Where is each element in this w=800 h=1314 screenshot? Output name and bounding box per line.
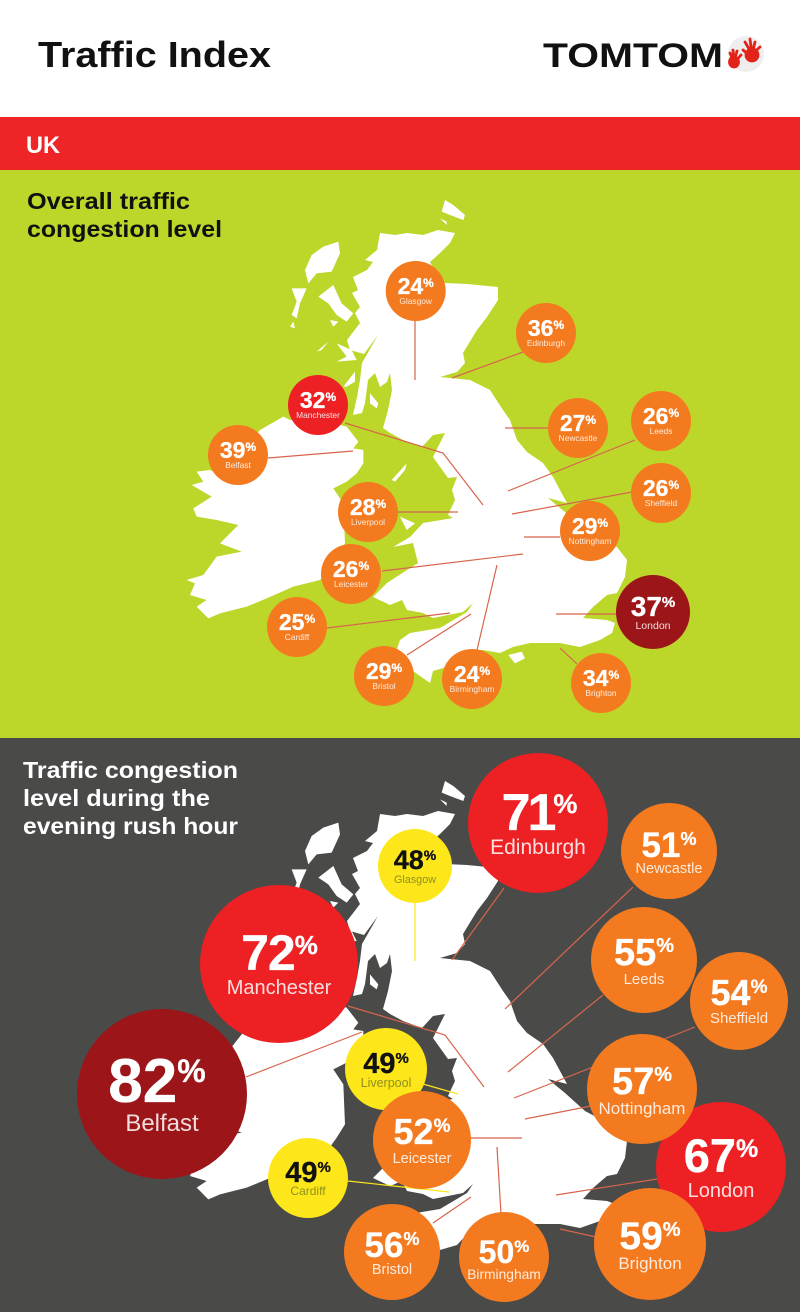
marker: Leicester: % [434,1116,451,1137]
marker: Nottingham: Nottingham [569,536,611,546]
marker: Brighton [571,653,631,713]
heading: evening rush hour: level during the [23,785,210,811]
marker: Bristol: % [391,661,402,675]
marker: Sheffield: Sheffield [710,1010,768,1027]
marker: London: 67 [684,1129,736,1182]
marker: London: London [688,1180,754,1202]
header band: UK [0,117,800,170]
marker: Liverpool: 28 [350,494,375,520]
marker: Cardiff [268,1138,348,1218]
marker: Bristol: Bristol [372,1262,412,1278]
header band: UK: UK [26,132,61,159]
marker: Edinburgh [468,753,608,893]
panel: overall traffic congestion level [0,170,800,738]
marker: Cardiff: % [317,1159,331,1176]
marker: Glasgow [378,829,452,903]
marker: Sheffield: % [751,977,768,998]
marker: Cardiff [267,597,327,657]
marker: London: London [635,620,671,632]
marker: Sheffield: 54 [711,972,751,1013]
marker: Bristol [354,646,414,706]
marker: Glasgow: % [424,847,437,863]
marker: Liverpool: 49 [363,1048,395,1080]
marker: Brighton: Brighton [618,1254,682,1273]
marker: Nottingham: % [597,516,608,530]
heading: overall: congestion level [27,216,222,242]
panel: evening rush hour congestion level [0,738,800,1312]
marker: Nottingham: 57 [612,1061,654,1103]
marker: Newcastle: 27 [560,410,585,436]
marker: Sheffield: 26 [643,475,668,501]
marker: Bristol: % [403,1229,419,1249]
marker: Brighton [594,1188,706,1300]
marker: Newcastle: Newcastle [636,861,702,877]
marker: Brighton: 34 [583,665,608,691]
marker: Manchester: Manchester [227,977,332,999]
connector lines [246,887,695,1237]
marker: Newcastle [548,398,608,458]
heading: evening rush hour [23,757,238,839]
marker: Birmingham: Birmingham [450,684,494,694]
marker: London [656,1102,786,1232]
marker: Leeds: % [668,406,679,420]
marker: Newcastle: 51 [642,826,680,865]
marker: Edinburgh: 71 [502,784,553,842]
marker: Manchester [200,885,358,1043]
marker: Newcastle: % [680,829,696,849]
marker: Manchester: 72 [241,925,295,981]
marker: London: % [662,594,675,611]
marker: Manchester: % [295,930,318,960]
map: UK and Ireland [187,200,627,683]
marker: Birmingham: 50 [479,1234,514,1270]
marker: Leeds: 55 [614,932,656,974]
marker: London [616,575,690,649]
marker: Glasgow: Glasgow [399,296,433,306]
marker: Glasgow: % [423,276,434,290]
map: UK and Ireland [187,781,627,1264]
marker: Glasgow: Glasgow [394,874,436,886]
marker: Liverpool: % [375,497,386,511]
marker: Leicester: Leicester [393,1151,452,1167]
marker: Leeds: Leeds [624,971,664,988]
marker: Nottingham: % [654,1064,672,1086]
marker: Bristol: 29 [366,658,391,684]
marker: Brighton: % [663,1219,681,1241]
marker: Leicester: 52 [394,1111,434,1152]
marker: Edinburgh: Edinburgh [527,338,565,348]
marker: Edinburgh [516,303,576,363]
marker: Belfast: 82 [108,1047,177,1116]
marker: London: 37 [631,591,662,622]
marker: Newcastle: Newcastle [559,433,598,443]
marker: Leeds: % [656,935,674,957]
marker: Cardiff: 25 [279,609,304,635]
heading: overall: Overall traffic [27,188,190,214]
marker: Belfast: % [177,1053,206,1089]
marker: Sheffield: Sheffield [645,498,678,508]
marker: Edinburgh: % [553,318,564,332]
marker: Liverpool [338,482,398,542]
heading: evening rush hour: Traffic congestion [23,757,238,783]
marker: Birmingham: % [514,1237,529,1256]
marker: Leicester: 26 [333,556,358,582]
heading: evening rush hour: evening rush hour [23,813,238,839]
marker: Glasgow [386,261,446,321]
marker: Manchester: 32 [300,387,325,413]
connector lines [268,320,635,664]
marker: Cardiff: 49 [285,1157,317,1189]
marker: Leicester: Leicester [334,579,368,589]
marker: Leeds [631,391,691,451]
marker: Leicester [373,1091,471,1189]
marker: Birmingham [442,649,502,709]
marker: Cardiff: % [304,612,315,626]
marker: Bristol [344,1204,440,1300]
marker: Belfast: % [245,440,256,454]
marker: Birmingham: 24 [454,661,479,687]
marker: Brighton: 59 [619,1215,663,1258]
marker: Leeds [591,907,697,1013]
marker: Newcastle: % [585,413,596,427]
marker: Nottingham: 29 [572,513,597,539]
marker: Nottingham [587,1034,697,1144]
marker: Leeds: Leeds [650,426,672,436]
marker: Belfast: Belfast [125,1110,199,1137]
marker: Glasgow: 24 [398,273,423,299]
marker: Newcastle [621,803,717,899]
marker: Birmingham: Birmingham [467,1267,541,1282]
marker: Belfast [77,1009,247,1179]
marker: Manchester: % [325,390,336,404]
marker: Liverpool: Liverpool [361,1076,411,1090]
marker: Sheffield: % [668,478,679,492]
marker: Nottingham: Nottingham [599,1099,685,1118]
marker: Liverpool [345,1028,427,1110]
title: Traffic Index [38,34,271,75]
marker: Edinburgh: % [553,789,577,819]
marker: Liverpool: Liverpool [351,517,385,527]
marker: Nottingham [560,501,620,561]
marker: London: % [736,1135,758,1163]
marker: Liverpool: % [395,1050,409,1067]
marker: Edinburgh: Edinburgh [490,836,586,859]
marker: Birmingham: % [479,664,490,678]
marker: Cardiff: Cardiff [290,1184,326,1198]
marker: Sheffield [631,463,691,523]
marker: Cardiff: Cardiff [285,632,310,642]
marker: Edinburgh: 36 [528,315,553,341]
marker: Sheffield [690,952,788,1050]
marker: Leicester: % [358,559,369,573]
marker: Brighton: % [608,668,619,682]
logo: TomTom: TOMTOM [543,37,723,75]
marker: Belfast: 39 [220,437,245,463]
marker: Bristol: 56 [365,1226,403,1265]
logo: TomTom [543,36,764,75]
marker: Bristol: Bristol [372,681,396,691]
marker: Manchester [288,375,348,435]
marker: Leicester [321,544,381,604]
marker: Belfast [208,425,268,485]
marker: Brighton: Brighton [585,688,617,698]
marker: Manchester: Manchester [296,410,340,420]
marker: Birmingham [459,1212,549,1302]
marker: Glasgow: 48 [394,845,424,875]
marker: Belfast: Belfast [225,460,251,470]
heading: overall [27,188,222,242]
marker: Leeds: 26 [643,403,668,429]
